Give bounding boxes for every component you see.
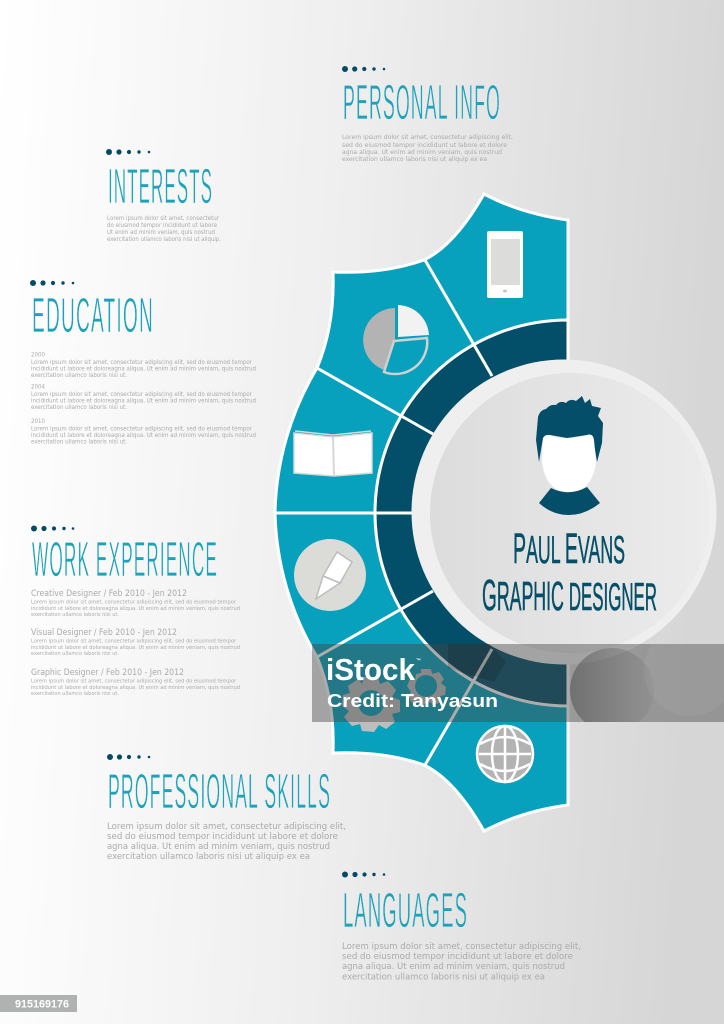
text block: exercitation ullamco laboris nisi ut aliquip. xyxy=(107,237,221,243)
section: professional skills xyxy=(107,754,346,862)
teal petals xyxy=(275,194,568,831)
inner disc xyxy=(430,373,710,653)
section: personal info xyxy=(342,66,513,163)
dots xyxy=(342,872,385,878)
text block: Lorem ipsum dolor sit amet, consectetur adipiscing elit, xyxy=(342,942,581,952)
dots xyxy=(106,149,150,155)
text block: Lorem ipsum dolor sit amet, consectetur adipiscing elit, sed do eiusmod tempor xyxy=(31,360,253,366)
text block: Ut enim ad minim veniam, quis nostrud xyxy=(107,230,215,236)
section: languages: LANGUAGES xyxy=(343,884,468,938)
icon: phone xyxy=(487,231,523,298)
text block: agna aliqua. Ut enim ad minim veniam, quis nostrud xyxy=(107,842,330,852)
semicircle wheel xyxy=(275,194,568,831)
icon: avatar xyxy=(536,396,603,515)
icon: pencil xyxy=(294,539,366,611)
text block: sed do eiusmod tempor incididunt ut labore et dolore xyxy=(342,142,507,149)
text block: 2000 xyxy=(31,352,45,358)
text block: Lorem ipsum dolor sit amet, consectetur adipiscing elit, xyxy=(107,822,346,832)
text block: Lorem ipsum dolor sit amet, consectetur adipiscing elit, xyxy=(342,134,513,141)
dots xyxy=(31,526,74,532)
text block: 2010 xyxy=(31,419,45,425)
text block: exercitation ullamco laboris nisi ut aliquip ex ea xyxy=(107,852,310,862)
band background xyxy=(312,644,724,722)
section: languages xyxy=(342,872,581,982)
text block: Lorem ipsum dolor sit amet, consectetur adipiscing elit, sed do eiusmod tempor xyxy=(31,392,253,398)
text block: agna aliqua. Ut enim ad minim veniam, quis nostrud xyxy=(342,962,565,972)
icon: gears xyxy=(342,669,446,732)
text block: incididunt ut labore et doloreagna aliqua. Ut enim ad minim veniam, quis nostrud xyxy=(31,645,240,651)
text block: sed do eiusmod tempor incididunt ut labore et dolore xyxy=(107,832,338,842)
text block: exercitation ullamco laboris nisi ut. xyxy=(31,405,127,411)
text block: exercitation ullamco laboris nisi ut aliquip ex ea xyxy=(342,156,487,163)
dots xyxy=(107,754,150,760)
text: PROFESSIONAL SKILLS xyxy=(108,765,331,819)
text block: exercitation ullamco laboris nisi ut aliquip ex ea xyxy=(342,972,545,982)
text block: incididunt ut labore et doloreagna aliqua. Ut enim ad minim veniam, quis nostrud xyxy=(31,685,240,691)
section: education: EDUCATION xyxy=(32,289,154,343)
text block: Graphic Designer / Feb 2010 - Jen 2012 xyxy=(31,667,184,677)
icon: globe xyxy=(477,726,533,782)
text block: incididunt ut labore et doloreagna aliqua. Ut enim ad minim veniam, quis nostrud xyxy=(31,366,256,372)
image id: 915169176 xyxy=(15,998,69,1010)
text block: Lorem ipsum dolor sit amet, consectetur adipiscing elit, sed do eiusmod tempor xyxy=(31,600,237,606)
text block: incididunt ut labore et doloreagna aliqua. Ut enim ad minim veniam, quis nostrud xyxy=(31,398,256,404)
text block: agna aliqua. Ut enim ad minim veniam, quis nostrud xyxy=(342,149,502,156)
dots xyxy=(342,66,385,72)
text block xyxy=(107,216,221,243)
trademark: ™ xyxy=(416,658,421,664)
icon: pie chart xyxy=(363,305,429,374)
text block: exercitation ullamco laboris nisi ut. xyxy=(31,651,119,657)
text block xyxy=(31,588,240,697)
text block xyxy=(31,352,256,446)
text block: sed do eiusmod tempor incididunt ut labore et dolore xyxy=(342,952,573,962)
name: PAUL EVANS xyxy=(513,525,625,573)
text block: exercitation ullamco laboris nisi ut. xyxy=(31,691,119,697)
section: work experience xyxy=(31,526,240,697)
text block: Lorem ipsum dolor sit amet, consectetur xyxy=(107,216,220,222)
text block: 2004 xyxy=(31,384,45,390)
text block: Lorem ipsum dolor sit amet, consectetur adipiscing elit, sed do eiusmod tempor xyxy=(31,638,237,644)
text block xyxy=(342,134,513,163)
text block xyxy=(107,822,346,862)
watermark band xyxy=(312,644,724,722)
watermark credit: Credit: Tanyasun xyxy=(327,690,498,711)
text block: Lorem ipsum dolor sit amet, consectetur adipiscing elit, sed do eiusmod tempor xyxy=(31,426,253,432)
dark ring xyxy=(375,320,568,706)
text: WORK EXPERIENCE xyxy=(32,533,218,587)
profile circle xyxy=(412,360,716,664)
watermark logo: iStock xyxy=(326,652,416,687)
text block: exercitation ullamco laboris nisi ut. xyxy=(31,373,127,379)
text block: incididunt ut labore et doloreagna aliqua. Ut enim ad minim veniam, quis nostrud xyxy=(31,606,240,612)
section: education xyxy=(30,280,256,446)
text block: incididunt ut labore et doloreagna aliqua. Ut enim ad minim veniam, quis nostrud xyxy=(31,433,256,439)
text: INTERESTS xyxy=(108,160,213,214)
text block: do eiusmod tempor incididunt ut labore xyxy=(107,223,217,229)
text block: exercitation ullamco laboris nisi ut. xyxy=(31,612,119,618)
outer ring xyxy=(412,360,716,664)
dots xyxy=(30,280,74,286)
icon: book xyxy=(294,431,372,476)
text block: exercitation ullamco laboris nisi ut. xyxy=(31,440,127,446)
section: interests xyxy=(106,149,221,243)
text block: Creative Designer / Feb 2010 - Jen 2012 xyxy=(31,588,187,598)
image id tag xyxy=(0,995,77,1012)
petal dividers xyxy=(275,260,492,765)
text block: Visual Designer / Feb 2010 - Jen 2012 xyxy=(31,627,177,637)
text block xyxy=(342,942,581,982)
text block: Lorem ipsum dolor sit amet, consectetur adipiscing elit, sed do eiusmod tempor xyxy=(31,678,237,684)
